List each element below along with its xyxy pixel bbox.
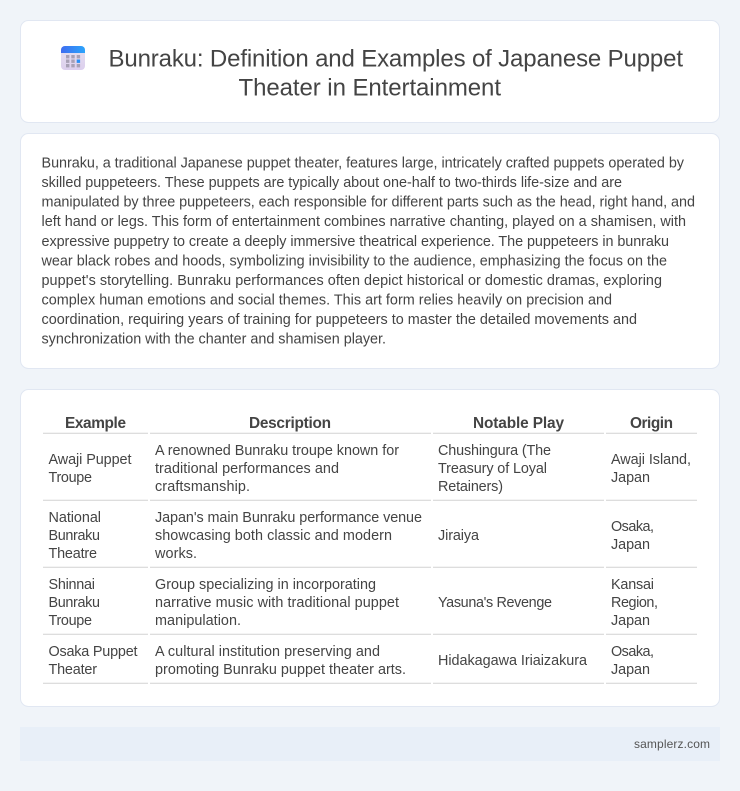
table row: Awaji Puppet Troupe: Awaji Island, [611, 452, 691, 468]
panel: description [20, 134, 720, 368]
description text [40, 156, 695, 348]
table row: National Bunraku Theatre: showcasing both classic and modern [155, 528, 392, 544]
footer [20, 727, 720, 761]
table row: Shinnai Bunraku Troupe: manipulation. [155, 613, 241, 629]
table row: National Bunraku Theatre: Bunraku [48, 528, 100, 544]
table row: Shinnai Bunraku Troupe: Kansai [611, 577, 654, 593]
table row: Shinnai Bunraku Troupe: Troupe [48, 613, 92, 629]
title [108, 46, 683, 101]
table row: Osaka Puppet Theater: Osaka, [611, 644, 654, 660]
table row: Awaji Puppet Troupe: craftsmanship. [155, 479, 250, 495]
table row: Shinnai Bunraku Troupe: Japan [611, 613, 650, 629]
table row: National Bunraku Theatre: Osaka, [611, 519, 654, 535]
description text: Bunraku, a traditional Japanese puppet theater, features large, intricately crafted puppets operated by [42, 156, 685, 172]
table header row [43, 415, 697, 434]
description text: manipulated by three puppeteers, each responsible for different parts such as the head, right hand, and [42, 195, 695, 211]
table header row: Description [249, 415, 331, 432]
description text: wear black robes and hoods, symbolizing invisibility to the audience, emphasizing the focus on the [40, 253, 667, 269]
table row: National Bunraku Theatre: Japan's main Bunraku performance venue [155, 510, 422, 526]
table header row: Example [65, 415, 126, 432]
description text: skilled puppeteers. These puppets are typically about one-half to two-thirds life-size and are [42, 175, 622, 191]
table row: National Bunraku Theatre: works. [154, 546, 197, 562]
table row: Awaji Puppet Troupe: Retainers) [438, 479, 503, 495]
table row: Shinnai Bunraku Troupe: Region, [611, 595, 658, 611]
table row: Awaji Puppet Troupe: Treasury of Loyal [438, 461, 547, 477]
table row: Shinnai Bunraku Troupe: Bunraku [48, 595, 100, 611]
table row: Osaka Puppet Theater [43, 644, 697, 684]
table row: Awaji Puppet Troupe: A renowned Bunraku troupe known for [155, 443, 399, 459]
table row: Shinnai Bunraku Troupe: Yasuna's Revenge [438, 595, 552, 611]
table row: Shinnai Bunraku Troupe: Shinnai [48, 577, 95, 593]
table row: Awaji Puppet Troupe: Awaji Puppet [48, 452, 132, 468]
table row: Shinnai Bunraku Troupe: Group specializing in incorporating [155, 577, 376, 593]
description text: left hand or legs. This form of entertainment combines narrative chanting, played on a shamisen, with [42, 214, 686, 230]
table row: Osaka Puppet Theater: promoting Bunraku puppet theater arts. [155, 662, 406, 678]
table header row: Origin [630, 415, 673, 432]
panel: examples table [20, 390, 720, 706]
description text: complex human emotions and social themes. This art form relies heavily on precision and [42, 292, 612, 308]
table row: Awaji Puppet Troupe: traditional performances and [155, 461, 339, 477]
description text: expressive puppetry to create a deeply immersive theatrical experience. The puppeteers in bunraku [42, 234, 669, 250]
table row: Osaka Puppet Theater: Hidakagawa Iriaizakura [438, 653, 587, 669]
table row: Awaji Puppet Troupe: Troupe [48, 470, 92, 486]
table row: Osaka Puppet Theater: Japan [611, 662, 650, 678]
table row: National Bunraku Theatre [43, 510, 697, 568]
table row: Osaka Puppet Theater: Theater [48, 662, 97, 678]
table row: Awaji Puppet Troupe: Japan [611, 470, 650, 486]
description text: coordination, requiring years of training for puppeteers to master the detailed movements and [42, 312, 637, 328]
table row: Osaka Puppet Theater: A cultural institution preserving and [155, 644, 380, 660]
table row: Osaka Puppet Theater: Osaka Puppet [48, 644, 138, 660]
description text: puppet's storytelling. Bunraku performances often depict historical or domestic dramas, exploring [42, 273, 662, 289]
table row: Shinnai Bunraku Troupe [43, 577, 697, 635]
table row: National Bunraku Theatre: Jiraiya [438, 528, 479, 544]
icon: calendar [61, 46, 85, 70]
table row: National Bunraku Theatre: National [48, 510, 101, 526]
table row: Awaji Puppet Troupe [43, 443, 697, 501]
table row: National Bunraku Theatre: Japan [611, 537, 650, 553]
title: Bunraku: Definition and Examples of Japanese Puppet [108, 46, 683, 72]
table row: Shinnai Bunraku Troupe: narrative music with traditional puppet [155, 595, 399, 611]
footer: samplerz.com [634, 737, 710, 751]
panel: header [20, 20, 720, 122]
table row: Awaji Puppet Troupe: Chushingura (The [438, 443, 551, 459]
description text: synchronization with the chanter and shamisen player. [42, 332, 386, 348]
title: Theater in Entertainment [238, 74, 501, 101]
table header row: Notable Play [473, 415, 564, 432]
table row: National Bunraku Theatre: Theatre [48, 546, 97, 562]
